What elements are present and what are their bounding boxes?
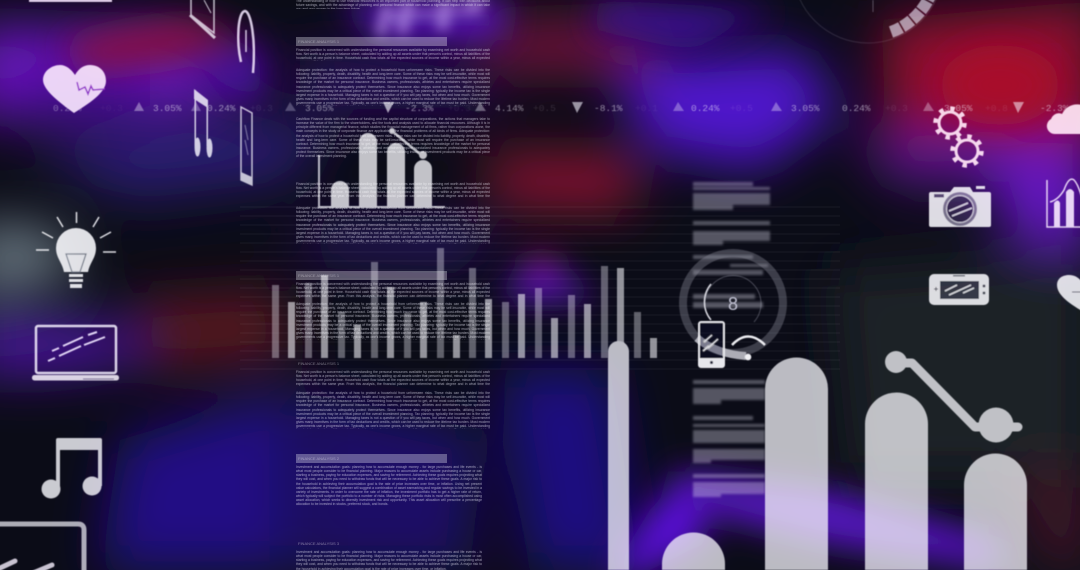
ticker: market percentages: 3.05%	[305, 103, 334, 114]
icon: top bar	[29, 0, 112, 2]
heading: finance analysis 3: FINANCE ANALYSIS 3	[298, 541, 339, 546]
ticker: market percentages: +0.3	[885, 103, 908, 114]
icon: camera	[929, 186, 991, 227]
wide bar chart	[272, 248, 657, 358]
heading: finance analysis 1: FINANCE ANALYSIS 1	[298, 39, 339, 44]
ticker: market percentages: -2.3%	[1040, 103, 1069, 114]
document text column	[296, 0, 490, 570]
heading: finance analysis 2	[296, 454, 447, 463]
icon: music note	[42, 438, 102, 498]
ticker: market percentages: 0.24%	[691, 103, 720, 114]
ticker: market percentages	[53, 102, 1069, 114]
heading: finance analysis 1: FINANCE ANALYSIS 1	[298, 273, 339, 278]
icon: smartphone	[699, 322, 724, 367]
paragraph: Investment and accumulation goals: planning how to accumulate enough money - for large purchases and life events - is what most people consider to be financial planning. Major reasons to accumulate assets include purchasing a house or car, starting a business, paying for education expenses, and saving for retirement. Achieving these goals requires projecting what they will cost, and when you need to withdraw funds that will be necessary to be able to achieve these goals. A major risk to the household in achieving their accumulation goal is the rate of price increases over time, or inflation. Using net present value calculators, the financial planner will suggest a combination of asset earmarking and regular savings to be invested in a variety of investments. In order to overcome the rate of inflation, the investment portfolio has to get a higher rate of return, which typically will subject the portfolio to a number of risks. Managing these portfolio risks is most often accomplished using asset allocation, which seeks to diversify investment risk and opportunity. This asset allocation will prescribe a percentage allocation to be invested in stocks, preferred stock, and bonds.	[296, 465, 482, 506]
ticker: market percentages: -8.1%	[594, 103, 623, 114]
heading: finance analysis 2: FINANCE ANALYSIS 2	[298, 456, 339, 461]
icon: skewed phone	[241, 107, 252, 185]
icon: gears	[936, 108, 982, 166]
large bars with trend line	[608, 341, 1027, 570]
icon: game console	[929, 274, 989, 305]
paragraph: Cashflow Finance deals with the sources of funding and the capital structure of corporations, the actions that managers take to increase the value of the firm to the shareholders, and the tools and analysis used to allocate financial resources. Although it is in principle different from managerial finance, which studies the financial management of all firms, rather than corporations alone, the main concepts in the study of corporate finance are applicable to the financial problems of all kinds of firms. Adequate protection: the analysis of how to protect a household from unforeseen risks. These risks can be divided into liability, property, death, disability, health and long-term care. Some of these risks may be self-insurable, while most will require the purchase of an insurance contract. Determining how much insurance to get, at the most cost-effective terms requires knowledge of the market for personal insurance. Business owners, professionals, athletes and entertainers require specialized insurance professionals to adequately protect themselves. Since insurance also enjoys some tax benefits, utilizing insurance investment products may be a critical piece of the overall investment planning.	[296, 117, 490, 158]
ticker: market percentages: +0.8	[985, 103, 1008, 114]
icon: monitor corner	[0, 524, 84, 570]
ticker: market percentages: 3.05%	[791, 103, 820, 114]
ticker: market percentages: 0.24%	[207, 103, 236, 114]
heading: finance analysis 1	[296, 37, 447, 46]
icon: gauge	[238, 11, 254, 73]
ticker: market percentages: +0.3	[448, 103, 471, 114]
ticker: market percentages: +0.1	[635, 103, 658, 114]
ticker: market percentages: +0.3	[100, 103, 123, 114]
ticker: market percentages: 3.05%	[944, 103, 973, 114]
ticker: market percentages: +0.5	[730, 103, 753, 114]
ticker: market percentages: 0.24%	[53, 103, 82, 114]
icon: heart at right edge	[1057, 275, 1080, 311]
icon: laptop	[32, 326, 119, 380]
icon: tablet	[190, 0, 215, 38]
ticker: market percentages: +0.5	[533, 103, 556, 114]
icon: heart with pulse	[43, 65, 106, 113]
dial gauge with number 8: 8	[728, 294, 738, 314]
ticker: market percentages: +0.3	[250, 103, 273, 114]
ticker: market percentages: -2.3%	[405, 103, 434, 114]
segmented arc dial top right	[793, 0, 943, 43]
icon: cloud	[1047, 104, 1080, 134]
blurred text blocks beside dial	[693, 182, 770, 497]
icon: area chart	[1047, 179, 1080, 227]
heading: finance analysis 1: FINANCE ANALYSIS 1	[298, 361, 339, 366]
small bar chart with trend line	[319, 128, 445, 207]
heading: finance analysis 1	[296, 271, 447, 280]
dial gauge with number 8	[683, 253, 783, 356]
ticker: market percentages: 3.05%	[153, 103, 182, 114]
ticker: market percentages: 0.24%	[842, 103, 871, 114]
icon: wifi signal	[732, 336, 765, 360]
ticker: market percentages: 4.14%	[495, 103, 524, 114]
icon: light bulb	[36, 212, 116, 288]
icon: skewed music note	[194, 89, 212, 158]
